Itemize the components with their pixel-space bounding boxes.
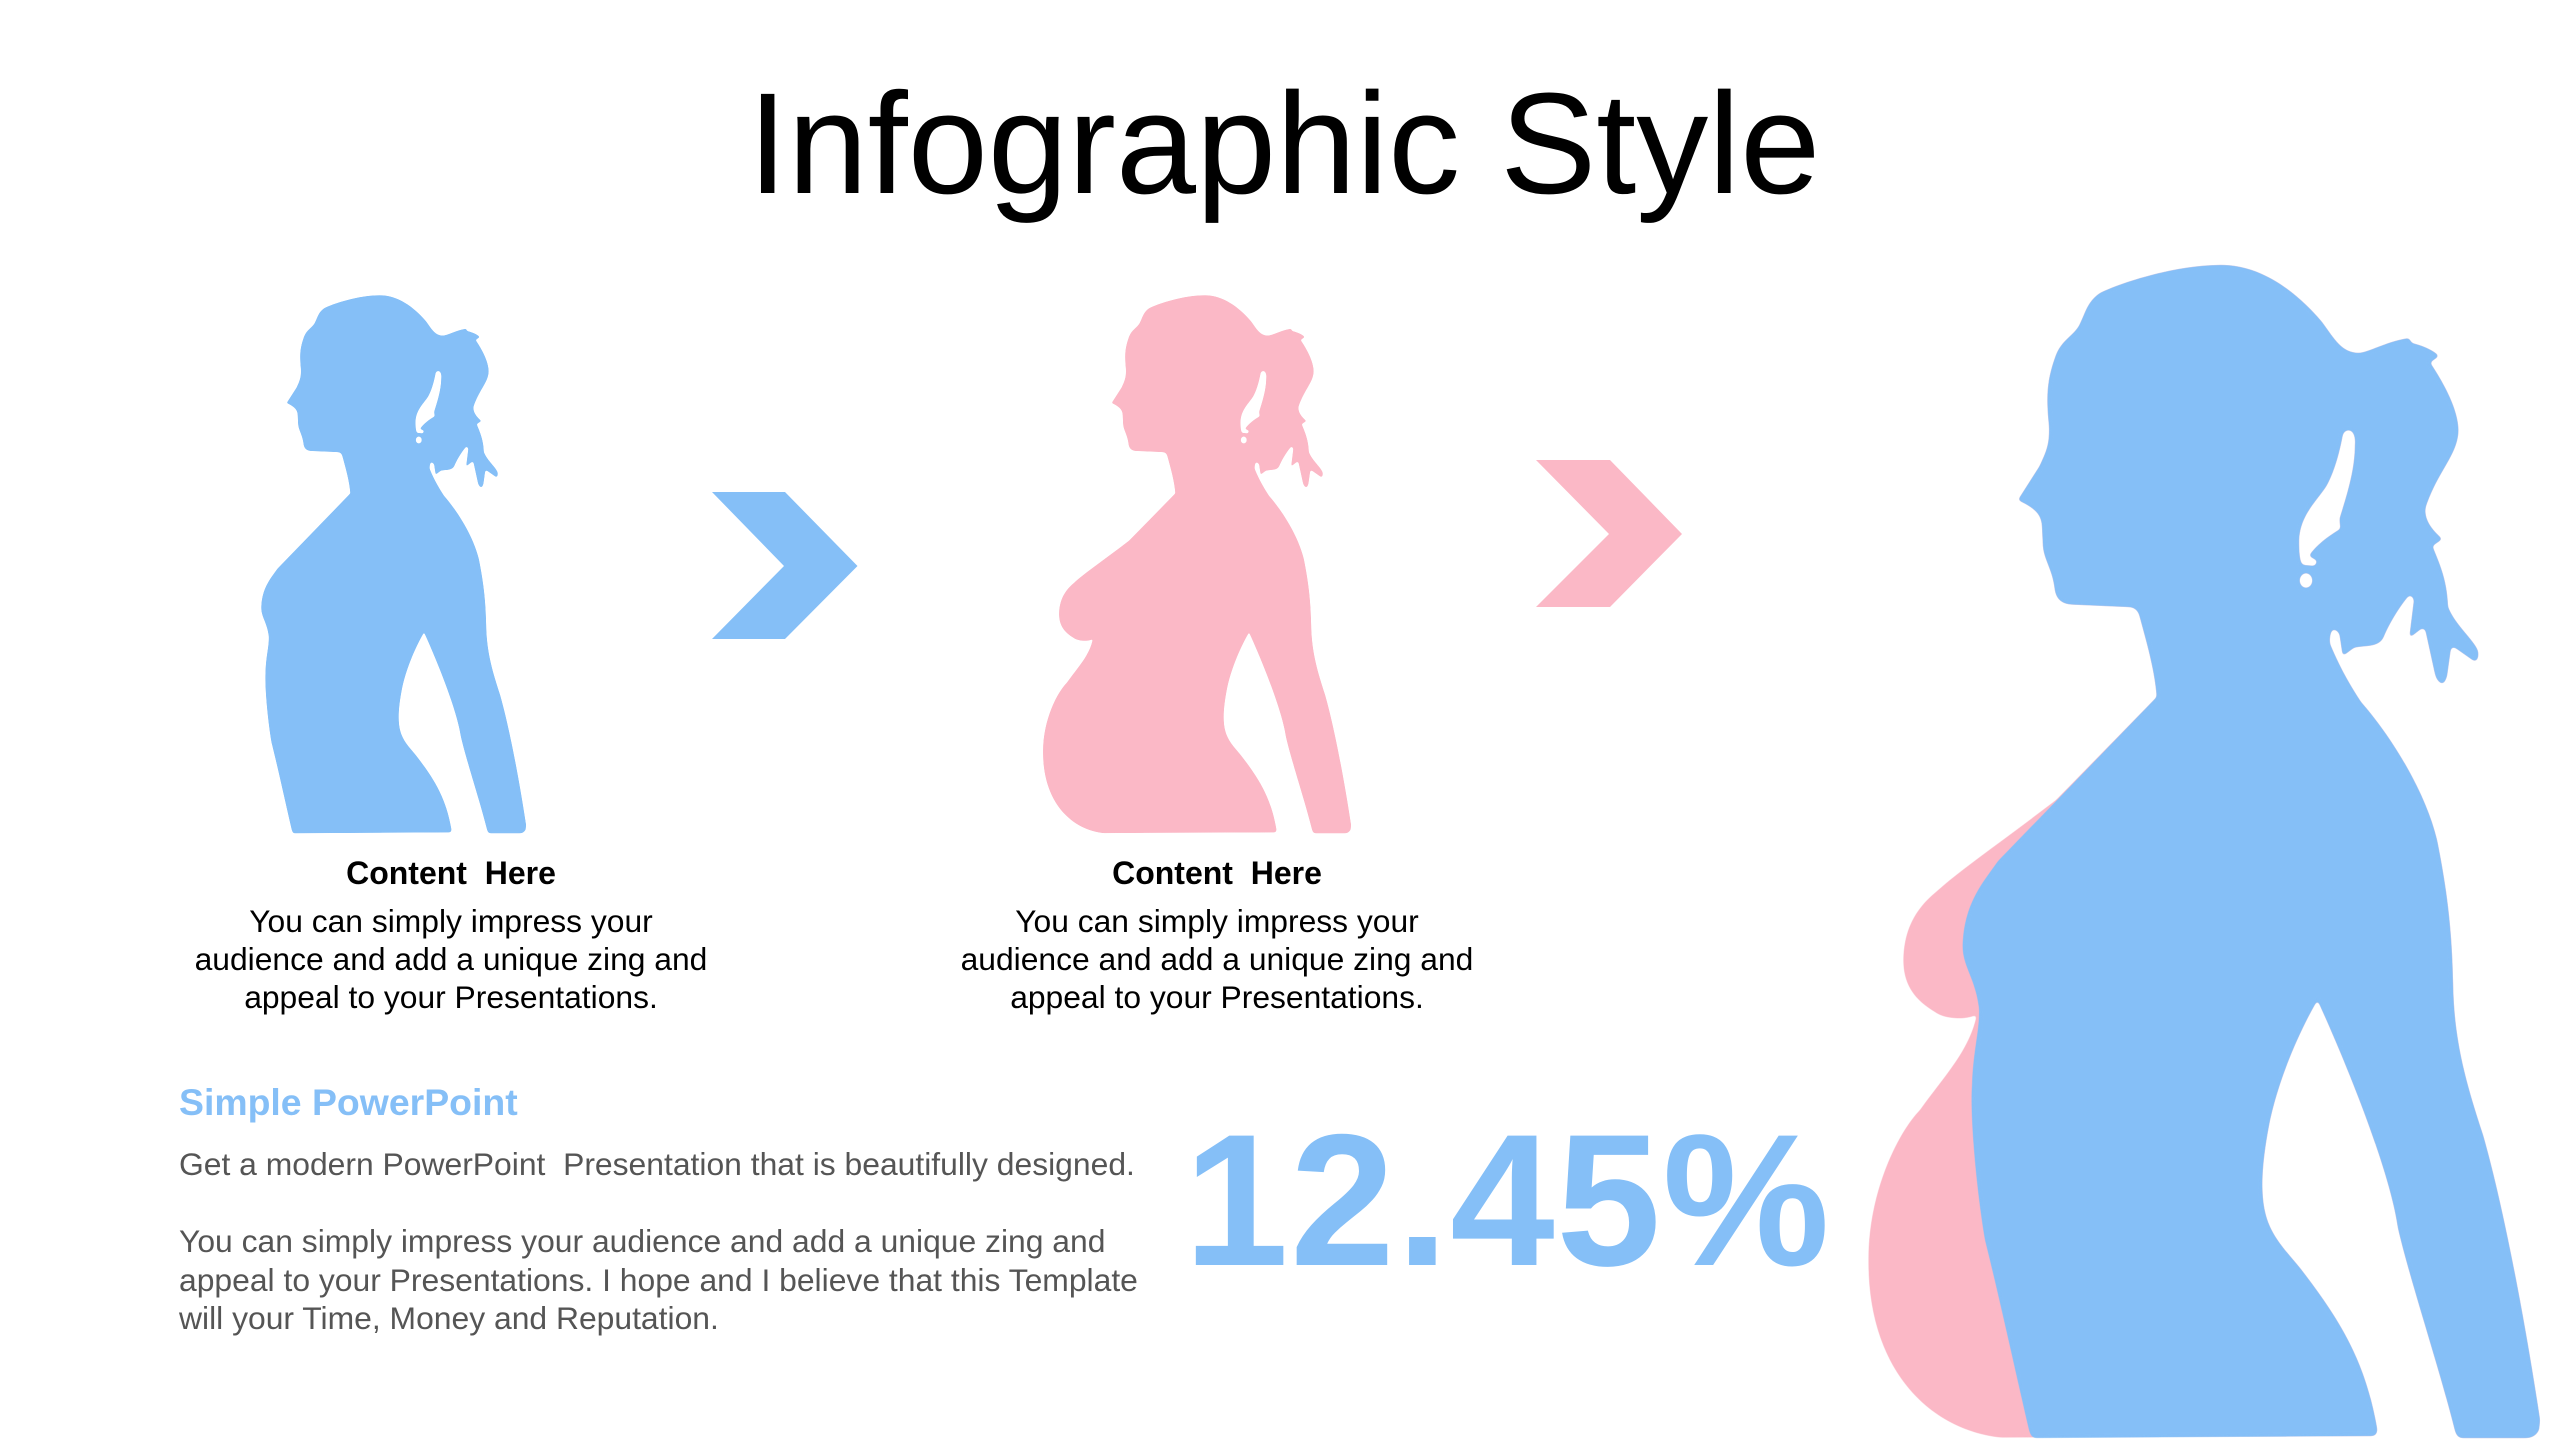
text block: description: appeal to your Presentations. I hope and I believe that this Template xyxy=(179,1262,1138,1298)
text block: first caption: audience and add a unique zing and xyxy=(195,941,707,977)
text block: second caption: audience and add a unique zing and xyxy=(961,941,1473,977)
arrow: blue chevron xyxy=(712,492,858,639)
icon: pregnant woman silhouette xyxy=(1043,295,1351,833)
text block: description: You can simply impress your audience and add a unique zing and xyxy=(179,1223,1105,1259)
text block: first caption: Content Here xyxy=(346,855,556,891)
text block: second caption xyxy=(961,855,1473,1015)
big number: 12.45%: 12.45% xyxy=(1184,1095,1831,1305)
heading: Simple PowerPoint: Simple PowerPoint xyxy=(179,1081,518,1123)
title: Infographic Style xyxy=(748,63,1820,224)
text block: description: will your Time, Money and Reputation. xyxy=(178,1300,719,1336)
text block: second caption: Content Here xyxy=(1112,855,1322,891)
text block: second caption: You can simply impress your xyxy=(1015,903,1419,939)
icon: large overlaid silhouettes comparison xyxy=(1868,265,2540,1438)
arrow: pink chevron xyxy=(1536,460,1682,607)
text block: description xyxy=(178,1146,1138,1336)
text block: second caption: appeal to your Presentations. xyxy=(1010,979,1424,1015)
text block: first caption: You can simply impress your xyxy=(249,903,653,939)
icon: non-pregnant woman silhouette xyxy=(261,295,526,833)
text block: first caption: appeal to your Presentations. xyxy=(244,979,658,1015)
text block: description: Get a modern PowerPoint Presentation that is beautifully designed. xyxy=(179,1146,1135,1182)
text block: first caption xyxy=(195,855,707,1015)
